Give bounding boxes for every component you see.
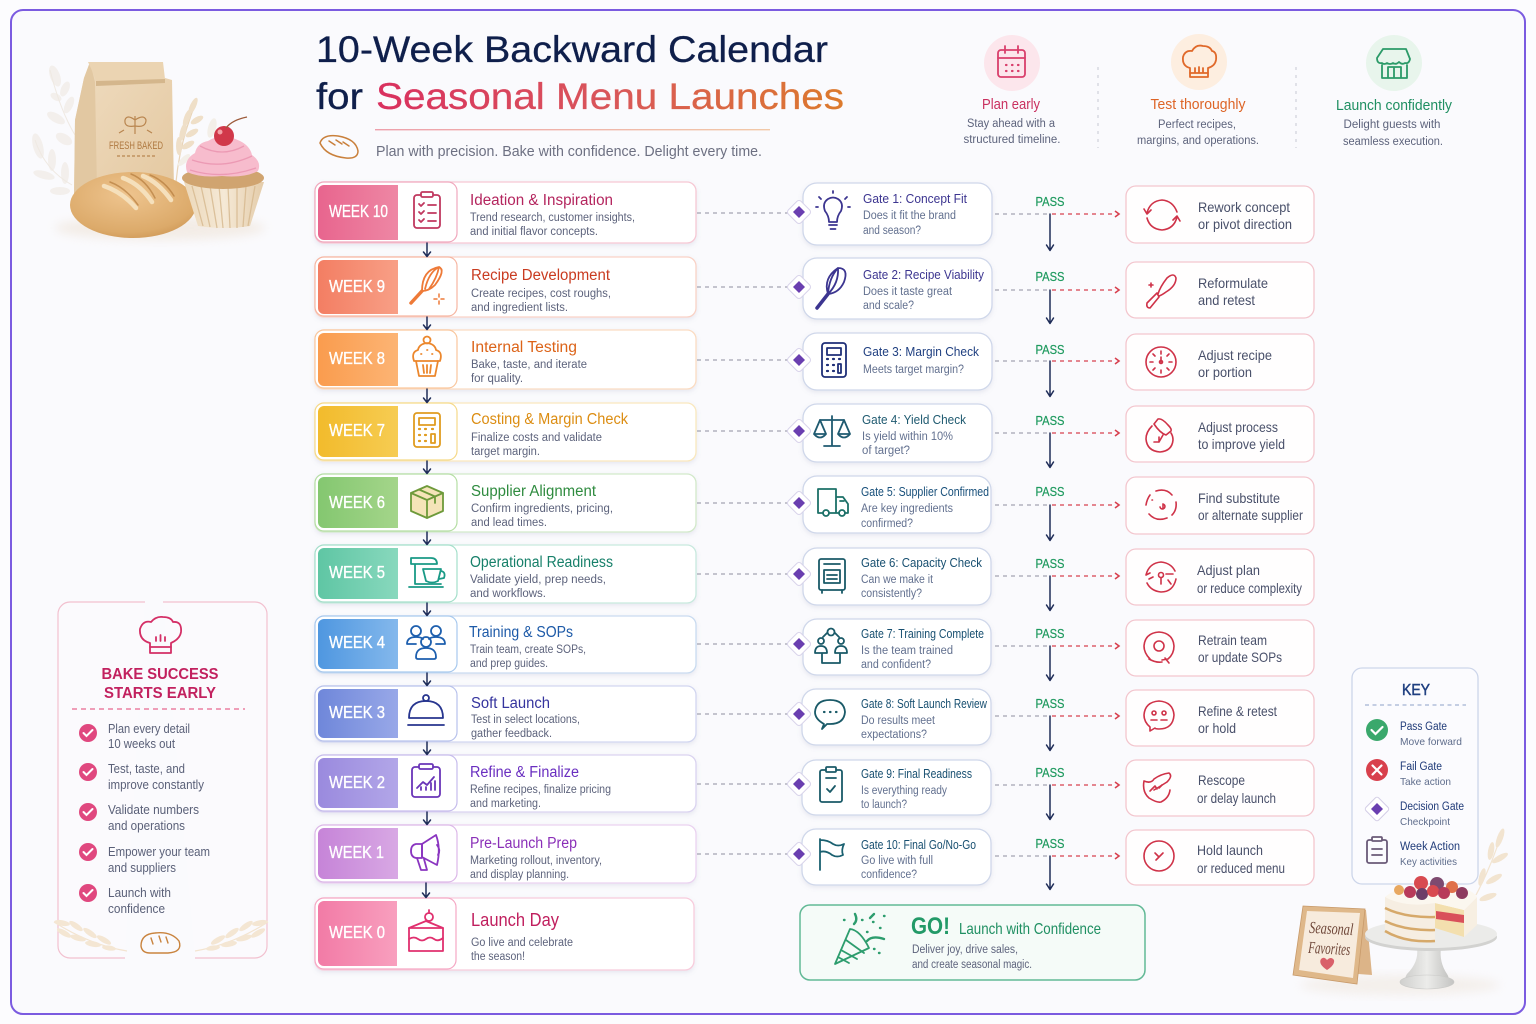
row: week 2: Refine & Finalize <box>470 764 579 781</box>
pass arrows down <box>1046 214 1054 890</box>
gate 8: expectations? <box>861 729 927 741</box>
row: week 5 <box>315 545 696 603</box>
gate 6 <box>786 548 991 605</box>
icon: light bulb <box>816 191 850 229</box>
fail action 2: Reformulate <box>1198 275 1268 291</box>
icon: whisk <box>817 268 846 308</box>
icon: calculator <box>822 343 846 377</box>
gate 3: Meets target margin? <box>863 364 964 376</box>
key item: pass gate: Pass Gate <box>1400 721 1447 733</box>
icon: rescope <box>1144 773 1171 802</box>
row: week 7: WEEK 7 <box>329 420 385 440</box>
gate 9: Gate 9: Final Readiness <box>861 767 972 781</box>
row: week 3: Test in select locations, <box>471 714 580 726</box>
fail action 10: Hold launch <box>1197 842 1263 858</box>
benefit: plan early: structured timeline. <box>964 134 1060 146</box>
key item: fail gate <box>1366 759 1451 788</box>
icon: clipboard chart <box>412 764 440 797</box>
decision diamond <box>786 490 812 516</box>
fail action 4: to improve yield <box>1198 436 1285 452</box>
panel: bake success starts early: STARTS EARLY <box>104 685 216 702</box>
row: week 5: Validate yield, prep needs, <box>470 574 606 586</box>
checklist item 2: improve constantly <box>108 778 205 792</box>
fail action 8 <box>1126 690 1314 746</box>
row: week 2: Refine recipes, finalize pricing <box>470 784 611 796</box>
key item: decision gate: Decision Gate <box>1400 801 1464 813</box>
gate 1: and season? <box>863 225 921 237</box>
key item: week action <box>1367 837 1460 868</box>
row: week 3 <box>315 686 696 742</box>
row: week 7: Costing & Margin Check <box>471 411 628 428</box>
gate 3 <box>786 333 992 390</box>
icon: plan cycle <box>1146 562 1176 592</box>
fail action 4 <box>1126 406 1314 462</box>
checklist item 2: Test, taste, and <box>108 762 185 776</box>
benefit: test thoroughly: margins, and operations. <box>1137 135 1259 147</box>
icon: balance scale <box>814 416 850 446</box>
gate 6: consistently? <box>861 588 922 600</box>
panel: bake success starts early <box>54 602 268 958</box>
row: week 7: target margin. <box>471 446 540 458</box>
icon: rework cycle <box>1144 200 1180 230</box>
checklist item 5 <box>79 884 171 916</box>
gate 4: of target? <box>862 445 910 457</box>
fail action 6: or reduce complexity <box>1197 580 1302 596</box>
illustration: cake on stand <box>1365 876 1497 989</box>
key item: week action: Week Action <box>1400 841 1460 853</box>
fail action 2: and retest <box>1198 292 1255 308</box>
title rule <box>375 129 770 130</box>
decision diamond <box>786 199 812 225</box>
decision diamond <box>786 418 812 444</box>
icon: delivery truck <box>818 489 848 516</box>
row: week 5: and workflows. <box>470 588 546 600</box>
row: week 0 <box>315 898 694 970</box>
icon: trained team <box>815 628 847 663</box>
fail action 10: or reduced menu <box>1197 860 1285 876</box>
gate 7: Is the team trained <box>861 645 953 657</box>
fail action 10 <box>1126 830 1314 885</box>
benefit: launch confidently: Delight guests with <box>1344 119 1440 131</box>
panel: go launch with confidence: Launch with Confidence <box>959 921 1101 938</box>
fail connectors: red segment with arrowheads <box>1052 211 1119 859</box>
title: 10-Week Backward Calendar <box>316 29 828 70</box>
pass labels: PASS <box>1036 343 1064 357</box>
gate 10: Gate 10: Final Go/No-Go <box>861 838 976 852</box>
decision diamond <box>786 841 812 867</box>
gate 2 <box>786 258 992 319</box>
row: week 9: Recipe Development <box>471 267 611 284</box>
icon: party popper <box>835 914 884 964</box>
row: week 1: Marketing rollout, inventory, <box>470 855 602 867</box>
benefit: test thoroughly <box>1137 34 1259 147</box>
row: week 0: Launch Day <box>471 910 559 930</box>
row: week 4: Train team, create SOPs, <box>470 644 586 656</box>
row: week 9: WEEK 9 <box>329 276 385 296</box>
fail action 5: or alternate supplier <box>1198 507 1303 523</box>
row: week 9 <box>315 257 696 317</box>
benefit: test thoroughly: Test thoroughly <box>1150 97 1246 113</box>
icon: dial <box>1146 347 1176 377</box>
week flow arrows <box>422 243 430 898</box>
decision diamond <box>786 771 812 797</box>
decision diamond <box>786 561 812 587</box>
row: week 2: WEEK 2 <box>329 772 385 792</box>
row: week 6 <box>315 474 696 532</box>
gate 1: Gate 1: Concept Fit <box>863 192 968 206</box>
icon: calendar <box>998 46 1025 77</box>
key item: fail gate: Fail Gate <box>1400 761 1442 773</box>
row: week 3: gather feedback. <box>471 728 552 740</box>
row: week 0: Go live and celebrate <box>471 937 573 949</box>
gate 7 <box>786 619 991 675</box>
checklist item 3 <box>79 803 199 833</box>
icon: package box <box>411 486 443 518</box>
row: week 6: Supplier Alignment <box>471 483 597 500</box>
illustration: wheat by key <box>1476 828 1509 903</box>
row: week 8: WEEK 8 <box>329 348 385 368</box>
fail action 3: Adjust recipe <box>1198 347 1272 363</box>
row: week 6: and lead times. <box>471 517 547 529</box>
row: week 8 <box>315 330 696 389</box>
gate 8: Gate 8: Soft Launch Review <box>861 697 988 711</box>
row: week 10 <box>315 182 696 243</box>
fail action 9 <box>1126 760 1314 816</box>
gate 4 <box>786 404 992 462</box>
gate 1 <box>786 183 992 245</box>
fail action 9: Rescope <box>1198 772 1245 788</box>
icon: chef hat <box>140 617 181 653</box>
row: week 9: and ingredient lists. <box>471 302 568 314</box>
pass labels <box>1036 195 1064 851</box>
checklist item 2 <box>79 762 205 792</box>
row: week 1 <box>315 825 696 883</box>
row: week 1: Pre-Launch Prep <box>470 835 577 852</box>
fail action 7 <box>1126 620 1314 676</box>
benefit: launch confidently <box>1336 35 1453 148</box>
panel: go launch with confidence: Deliver joy, drive sales, <box>912 944 1018 956</box>
row: week 3: WEEK 3 <box>329 702 385 722</box>
checklist item 1 <box>79 722 190 751</box>
fail action 2 <box>1126 262 1314 318</box>
row: week 6: Confirm ingredients, pricing, <box>471 503 613 515</box>
fail action 1: or pivot direction <box>1198 216 1292 232</box>
row: week 2: and marketing. <box>470 798 541 810</box>
gate 5 <box>786 476 991 533</box>
row: week 1: and display planning. <box>470 869 569 881</box>
benefit: launch confidently: Launch confidently <box>1336 98 1453 114</box>
row: week 10: Trend research, customer insights, <box>470 212 635 224</box>
gate 7: and confident? <box>861 659 931 671</box>
panel: go launch with confidence <box>800 905 1145 980</box>
benefit: plan early: Plan early <box>982 97 1041 113</box>
fail action 7: or update SOPs <box>1198 649 1282 665</box>
fail action 1 <box>1126 186 1314 243</box>
icon: cupcake <box>413 336 441 376</box>
key item: pass gate <box>1366 719 1462 748</box>
row: week 9: Create recipes, cost roughs, <box>471 288 611 300</box>
row: week 7 <box>315 403 696 461</box>
row: week 0: the season! <box>471 951 525 963</box>
gate 5: Are key ingredients <box>861 503 953 515</box>
row: week 0: WEEK 0 <box>329 922 385 942</box>
illustration: seasonal favorites sign: Seasonal <box>1309 918 1354 939</box>
icon: retrain target <box>1144 632 1174 663</box>
row: week 3: Soft Launch <box>471 695 550 712</box>
row: week 4: and prep guides. <box>470 658 548 670</box>
checklist item 1: Plan every detail <box>108 722 190 736</box>
icon: team of people <box>407 626 445 659</box>
wheat and bread decoration <box>54 919 268 953</box>
gate 6: Can we make it <box>861 574 934 586</box>
icon: commercial oven <box>819 559 845 593</box>
benefit: plan early <box>964 35 1060 146</box>
pass labels: PASS <box>1036 195 1064 209</box>
fail action 4: Adjust process <box>1198 419 1278 435</box>
pass labels: PASS <box>1036 766 1064 780</box>
gate 2: Does it taste great <box>863 286 953 298</box>
gate 9 <box>786 760 991 815</box>
row: week 8: Internal Testing <box>471 339 577 356</box>
key item: fail gate: Take action <box>1400 776 1451 788</box>
benefit: plan early: Stay ahead with a <box>967 118 1056 130</box>
decision diamond <box>786 274 812 300</box>
fail action 8: or hold <box>1198 720 1236 736</box>
gate 1: Does it fit the brand <box>863 210 956 222</box>
key item: week action: Key activities <box>1400 856 1457 868</box>
panel: key: KEY <box>1402 682 1430 699</box>
fail action 6 <box>1126 549 1314 605</box>
row: week 2 <box>315 755 696 812</box>
benefit: launch confidently: seamless execution. <box>1343 136 1443 148</box>
illustration: bakery bag, bread and cupcake: FRESH BAKED <box>109 140 163 152</box>
fail connectors: grey segment <box>995 214 1050 856</box>
gate 4: Gate 4: Yield Check <box>862 413 967 427</box>
subtitle: Plan with precision. Bake with confidence. Delight every time. <box>376 144 762 160</box>
icon: spatula and sparkle <box>1147 275 1176 308</box>
checklist item 5: confidence <box>108 902 165 916</box>
title <box>316 29 844 117</box>
illustration: bakery bag, bread and cupcake <box>30 62 265 240</box>
gate 8 <box>786 689 991 745</box>
gate 5: Gate 5: Supplier Confirmed <box>861 485 989 499</box>
icon: timer <box>1146 419 1173 452</box>
fail action 6: Adjust plan <box>1197 562 1260 578</box>
row: week 4 <box>315 616 696 673</box>
row: week 7: Finalize costs and validate <box>471 432 602 444</box>
gate 5: confirmed? <box>861 518 913 530</box>
title: for <box>316 76 363 117</box>
row: week 4: WEEK 4 <box>329 632 385 652</box>
week to gate connectors <box>697 213 788 854</box>
icon: serving cloche <box>408 695 444 725</box>
gate 9: Is everything ready <box>861 785 947 797</box>
row: week 5: Operational Readiness <box>470 554 613 571</box>
row: week 4: Training & SOPs <box>469 624 573 641</box>
panel: go launch with confidence: GO! <box>911 913 950 940</box>
benefit: test thoroughly: Perfect recipes, <box>1158 119 1236 131</box>
icon: megaphone <box>411 835 439 870</box>
icon: calculator <box>414 413 440 447</box>
row: week 10: Ideation & Inspiration <box>470 192 613 209</box>
icon: clipboard checklist <box>414 192 440 228</box>
row: week 5: WEEK 5 <box>329 562 385 582</box>
row: week 8: for quality. <box>471 373 523 385</box>
icon: bread loaf <box>320 136 358 158</box>
pass labels: PASS <box>1036 627 1064 641</box>
illustration: seasonal favorites sign: Favorites <box>1307 938 1351 959</box>
checklist item 1: 10 weeks out <box>108 737 175 751</box>
icon: stand mixer <box>409 558 445 587</box>
key item: pass gate: Move forward <box>1400 736 1462 748</box>
key item: decision gate <box>1364 796 1464 828</box>
fail action 5: Find substitute <box>1198 490 1280 506</box>
checklist item 4 <box>79 843 210 875</box>
pass labels: PASS <box>1036 557 1064 571</box>
fail action 5 <box>1126 477 1314 534</box>
heart <box>1320 958 1334 970</box>
gate 10: Go live with full <box>861 855 933 867</box>
icon: storefront <box>1377 49 1410 78</box>
gate 6: Gate 6: Capacity Check <box>861 556 983 570</box>
icon: flag <box>820 839 844 870</box>
icon: substitute cycle <box>1146 490 1176 519</box>
gate 2: and scale? <box>863 300 914 312</box>
gate 3: Gate 3: Margin Check <box>863 345 980 359</box>
row: week 10: WEEK 10 <box>329 201 388 221</box>
pass labels: PASS <box>1036 837 1064 851</box>
title: Seasonal Menu Launches <box>376 76 844 117</box>
panel: key <box>1352 668 1478 884</box>
gate 9: to launch? <box>861 799 907 811</box>
pass labels: PASS <box>1036 485 1064 499</box>
pass labels: PASS <box>1036 414 1064 428</box>
heading: BAKE SUCCESS <box>102 666 219 683</box>
checklist item 5: Launch with <box>108 886 171 900</box>
icon: clipboard check <box>820 767 842 802</box>
checklist item 4: and suppliers <box>108 861 176 875</box>
icon: chef hat <box>1183 46 1216 77</box>
gate 7: Gate 7: Training Complete <box>861 627 984 641</box>
fail action 1: Rework concept <box>1198 199 1290 215</box>
panel: go launch with confidence: and create seasonal magic. <box>912 959 1032 971</box>
fail action 7: Retrain team <box>1198 632 1267 648</box>
checklist item 3: Validate numbers <box>108 803 199 817</box>
fail action 8: Refine & retest <box>1198 703 1277 719</box>
pass labels: PASS <box>1036 270 1064 284</box>
row: week 8: Bake, taste, and iterate <box>471 359 587 371</box>
fail action 9: or delay launch <box>1197 790 1276 806</box>
row: week 6: WEEK 6 <box>329 492 385 512</box>
checklist item 3: and operations <box>108 819 185 833</box>
fail action 3 <box>1126 334 1314 390</box>
gate 10 <box>786 829 991 885</box>
key item: decision gate: Checkpoint <box>1400 816 1450 828</box>
gate 2: Gate 2: Recipe Viability <box>863 268 985 282</box>
illustration: seasonal favorites sign <box>1293 906 1500 995</box>
decision diamond <box>786 631 812 657</box>
checklist item 4: Empower your team <box>108 845 210 859</box>
fail action 3: or portion <box>1198 364 1252 380</box>
gate 8: Do results meet <box>861 715 936 727</box>
decision diamond <box>786 701 812 727</box>
row: week 10: and initial flavor concepts. <box>470 226 598 238</box>
icon: whisk <box>411 267 444 304</box>
gate 4: Is yield within 10% <box>862 431 953 443</box>
icon: speech bubble <box>815 700 845 729</box>
icon: slice of cake <box>409 910 443 951</box>
gate 10: confidence? <box>861 869 917 881</box>
decision diamond <box>786 347 812 373</box>
row: week 1: WEEK 1 <box>329 842 384 862</box>
icon: feedback face <box>1144 701 1174 731</box>
icon: hold clock <box>1144 841 1174 871</box>
pass labels: PASS <box>1036 697 1064 711</box>
